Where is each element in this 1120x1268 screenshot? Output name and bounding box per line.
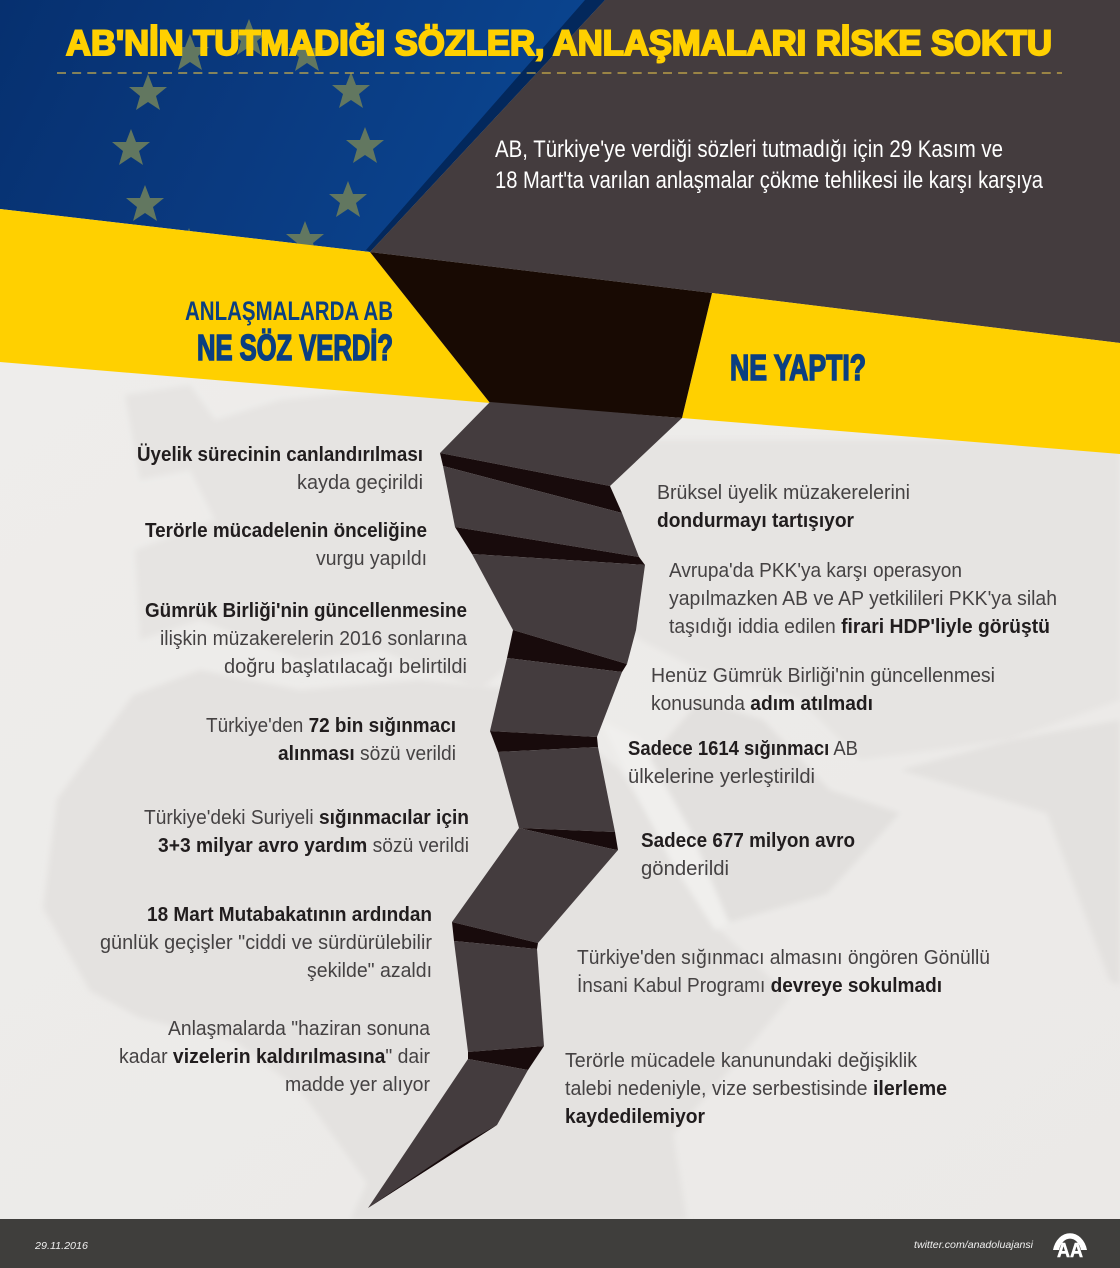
promise 2: Terörle mücadelenin önceliğine [145,520,427,542]
action 3: konusunda adım atılmadı [651,693,873,715]
flag diagonal shadow [366,0,605,252]
footer [0,1219,1120,1268]
crack: black gap [370,252,712,418]
action 5: gönderildi [641,858,729,880]
action 7 [565,1050,947,1128]
promise 5: 3+3 milyar avro yardım sözü verildi [158,835,469,857]
map: Arabia [640,700,900,925]
promise 6 [100,904,432,982]
action 2: yapılmazken AB ve AP yetkilileri PKK'ya silah [669,588,1057,610]
promise 5 [144,807,469,857]
promise 7 [119,1018,431,1096]
action 7: talebi nedeniyle, vize serbestisinde ilerleme [565,1078,947,1100]
heading: left: ANLAŞMALARDA AB [185,296,393,326]
promise 6: şekilde" azaldı [307,960,432,982]
crack: torn strip [368,402,682,1208]
promise 2: vurgu yapıldı [316,548,427,570]
promise 5: Türkiye'deki Suriyeli sığınmacılar için [144,807,469,829]
action 2 [669,560,1057,638]
promise 1 [137,443,423,494]
social handle: twitter.com/anadoluajansi [914,1239,1034,1251]
action 4 [628,738,858,788]
promise 3 [145,600,468,678]
promise 7: Anlaşmalarda "haziran sonuna [168,1018,431,1040]
intro text [495,136,1044,194]
action 4: Sadece 1614 sığınmacı AB [628,738,858,760]
EU flag panel [0,0,605,264]
promise 7: kadar vizelerin kaldırılmasına" dair [119,1046,430,1068]
action 6: İnsani Kabul Programı devreye sokulmadı [577,974,942,997]
action 5 [641,830,855,880]
promise 4: alınması sözü verildi [278,743,456,765]
dark panel: top right [370,0,1120,343]
action 1: dondurmayı tartışıyor [657,510,854,532]
action 3: Henüz Gümrük Birliği'nin güncellenmesi [651,665,995,687]
heading: right: NE YAPTI? [730,347,866,388]
background map panel [0,360,1120,1220]
action 1 [657,482,910,532]
icon: AA logo [1053,1233,1087,1262]
promise 4 [206,715,456,765]
promise 6: 18 Mart Mutabakatının ardından [147,904,432,926]
title dashed rule [57,72,1062,74]
action 4: ülkelerine yerleştirildi [628,766,815,788]
promise 1: Üyelik sürecinin canlandırılması [137,443,423,466]
yellow panel: left [0,209,490,403]
action 7: kaydedilemiyor [565,1106,705,1128]
action 1: Brüksel üyelik müzakerelerini [657,482,910,504]
promise 2 [145,520,427,570]
promise 3: Gümrük Birliği'nin güncellenmesine [145,600,467,622]
promise 3: ilişkin müzakerelerin 2016 sonlarına [160,628,468,650]
icon: EU stars [112,19,384,264]
promise 1: kayda geçirildi [297,472,423,494]
yellow panel: right [682,293,1120,454]
title: AB'NİN TUTMADIĞI SÖZLER, ANLAŞMALARI RİSKE SOKTU [66,23,1052,63]
action 5: Sadece 677 milyon avro [641,830,855,852]
date: 29.11.2016 [34,1240,88,1252]
map: Africa [43,670,790,1220]
intro text: AB, Türkiye'ye verdiği sözleri tutmadığı için 29 Kasım ve [495,136,1003,163]
promise 6: günlük geçişler "ciddi ve sürdürülebilir [100,932,432,954]
map: India [900,720,1120,985]
action 3 [651,665,995,715]
action 6 [577,947,990,997]
heading: left [185,296,393,368]
promise 3: doğru başlatılacağı belirtildi [224,656,467,678]
heading: left: NE SÖZ VERDİ? [197,327,393,368]
promise 4: Türkiye'den 72 bin sığınmacı [206,715,456,737]
map: Red Sea highlight [600,720,730,930]
action 6: Türkiye'den sığınmacı almasını öngören Gönüllü [577,947,990,969]
promise 7: madde yer alıyor [285,1074,430,1096]
icon: AA logo: AA [1057,1240,1083,1262]
map: Europe [125,385,1120,760]
action 7: Terörle mücadele kanunundaki değişiklik [565,1050,918,1072]
action 2: taşıdığı iddia edilen firari HDP'liyle görüştü [669,616,1050,638]
action 2: Avrupa'da PKK'ya karşı operasyon [669,560,962,582]
right column: actions [565,482,1057,1128]
left column: promises [100,443,469,1096]
